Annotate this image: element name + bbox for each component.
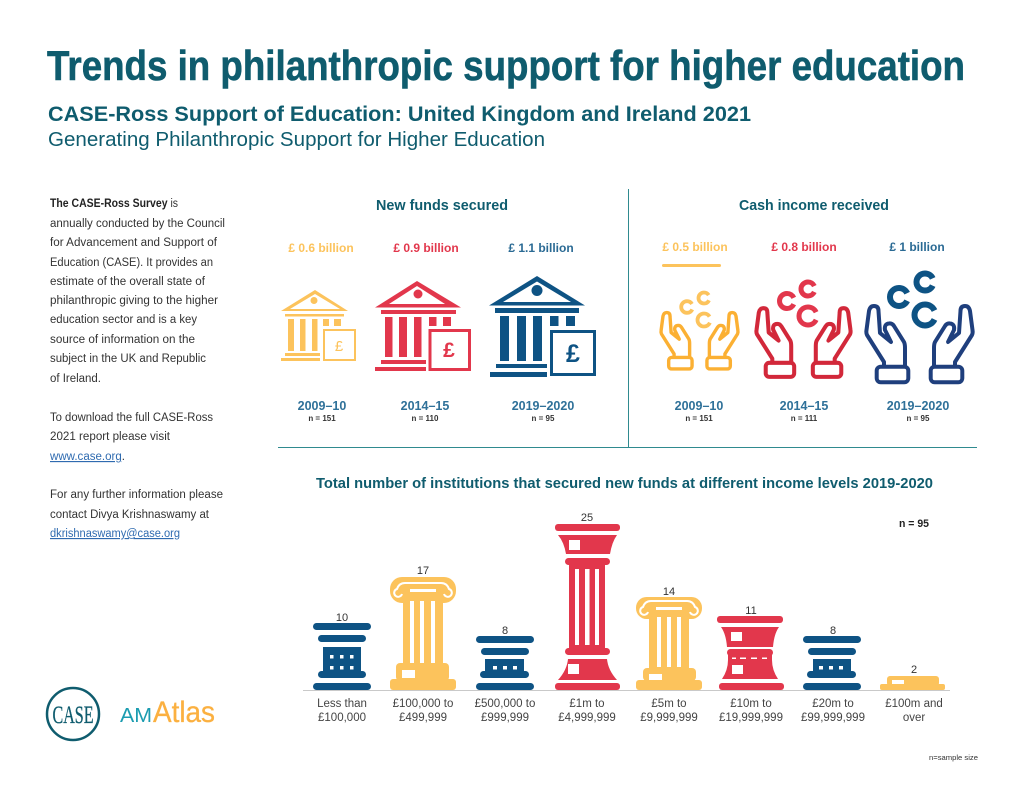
column: £10m to £19,999,999: £10m to bbox=[730, 698, 772, 710]
year label 2014-15: 2014–15 bbox=[780, 399, 828, 413]
column: £5m to £9,999,999 bbox=[636, 586, 702, 724]
column: £20m to £99,999,999: 8 bbox=[830, 625, 836, 637]
icon: red bank with pound box: £ bbox=[443, 339, 455, 362]
subtitle: CASE-Ross Support of Education: United Kingdom and Ireland 2021 bbox=[48, 103, 751, 126]
column: £100,000 to £499,999: £499,999 bbox=[399, 712, 447, 724]
year label 2019-2020: 2019–2020 bbox=[512, 399, 574, 413]
year label 2014-15 bbox=[401, 399, 449, 423]
column: £20m to £99,999,999: £20m to bbox=[812, 698, 854, 710]
column: £100,000 to £499,999: 17 bbox=[417, 565, 429, 577]
icon: yellow bank with pound box bbox=[281, 290, 355, 361]
icon: red hands and coins bbox=[756, 282, 851, 377]
year label 2014-15: n = 110 bbox=[412, 414, 439, 423]
icon: blue bank with pound box bbox=[489, 276, 594, 377]
logo: AMAtlas bbox=[120, 696, 215, 729]
amount 2019-2020: £ 1.1 billion bbox=[508, 241, 574, 255]
column: less than £100,000: £100,000 bbox=[318, 712, 366, 724]
column: £5m to £9,999,999: £9,999,999 bbox=[640, 712, 698, 724]
logo: AMAtlas: AM bbox=[120, 705, 152, 727]
panel: new funds secured bbox=[281, 197, 594, 423]
text block: about the survey: education sector and is a key bbox=[50, 314, 197, 326]
text block: about the survey: source of information on the bbox=[50, 334, 195, 346]
text block: about the survey: estimate of the overall state of bbox=[50, 276, 206, 288]
column: £100m and over bbox=[880, 664, 945, 724]
text block: about the survey: annually conducted by the Council bbox=[50, 218, 225, 230]
report name: Generating Philanthropic Support for Higher Education bbox=[48, 129, 545, 151]
column: £5m to £9,999,999: £5m to bbox=[651, 698, 687, 710]
year label 2009-10 bbox=[675, 399, 723, 423]
column: £10m to £19,999,999: 11 bbox=[745, 605, 757, 617]
column: £1m to £4,999,999: £1m to bbox=[569, 698, 605, 710]
amount 2009-10: £ 0.5 billion bbox=[662, 240, 728, 254]
amount 2014-15: £ 0.8 billion bbox=[771, 240, 837, 254]
text block: contact: contact Divya Krishnaswamy at bbox=[50, 509, 210, 521]
footnote: n=sample size bbox=[929, 753, 978, 762]
text block: about the survey: Education (CASE). It provides an bbox=[50, 257, 213, 269]
column: £500,000 to £999,999 bbox=[475, 625, 535, 724]
sample size note: n = 95 bbox=[899, 518, 929, 530]
year label 2009-10 bbox=[298, 399, 346, 423]
column: £1m to £4,999,999: 25 bbox=[581, 512, 593, 524]
column: less than £100,000 bbox=[313, 612, 371, 724]
year label 2014-15: n = 111 bbox=[791, 414, 818, 423]
text block: contact bbox=[50, 489, 223, 540]
column: £20m to £99,999,999 bbox=[801, 625, 865, 724]
icon: blue bank with pound box: £ bbox=[566, 340, 580, 368]
logo: CASE: CASE bbox=[52, 702, 94, 729]
column: £100,000 to £499,999: £100,000 to bbox=[393, 698, 453, 710]
year label 2009-10: n = 151 bbox=[308, 414, 336, 423]
year label 2019-2020: n = 95 bbox=[907, 414, 930, 423]
column: £20m to £99,999,999: £99,999,999 bbox=[801, 712, 865, 724]
year label 2019-2020: 2019–2020 bbox=[887, 399, 949, 413]
amount 2014-15: £ 0.9 billion bbox=[393, 241, 459, 255]
text block: contact: For any further information please bbox=[50, 489, 223, 501]
axis line bbox=[303, 690, 950, 691]
column: £100m and over: £100m and bbox=[885, 698, 943, 710]
column: £10m to £19,999,999 bbox=[717, 605, 784, 724]
panel: institutions by income level bbox=[303, 475, 950, 724]
panel dividers bbox=[278, 189, 977, 448]
column: £1m to £4,999,999 bbox=[555, 512, 620, 724]
year label 2009-10: 2009–10 bbox=[675, 399, 723, 413]
column: £10m to £19,999,999: £19,999,999 bbox=[719, 712, 783, 724]
text block: about the survey: subject in the UK and Republic bbox=[50, 353, 206, 365]
column: £100,000 to £499,999 bbox=[390, 565, 456, 724]
heading: chart title: Total number of institutions that secured new funds at different income levels 2019-2020 bbox=[316, 475, 933, 492]
text block: about the survey: philanthropic giving to the higher bbox=[50, 295, 218, 307]
text block: download report: To download the full CASE-Ross bbox=[50, 412, 213, 424]
icon: blue hands and coins bbox=[866, 274, 973, 382]
year label 2019-2020: n = 95 bbox=[532, 414, 555, 423]
column: less than £100,000: Less than bbox=[317, 698, 367, 710]
text block: download report: 2021 report please visit bbox=[50, 431, 171, 443]
text block: about the survey: The CASE-Ross Survey is bbox=[50, 198, 178, 210]
logo: CASE bbox=[47, 688, 99, 740]
year label 2019-2020 bbox=[887, 399, 949, 423]
column: £5m to £9,999,999: 14 bbox=[663, 586, 675, 598]
yellow underline bbox=[662, 264, 721, 267]
column: less than £100,000: 10 bbox=[336, 612, 348, 624]
heading: new funds secured: New funds secured bbox=[376, 197, 508, 214]
text block: download report: www.case.org. bbox=[49, 451, 125, 463]
column: £100m and over: 2 bbox=[911, 664, 917, 676]
amount 2019-2020: £ 1 billion bbox=[889, 240, 945, 254]
column: £500,000 to £999,999: £500,000 to bbox=[475, 698, 535, 710]
text block: about the survey: for Advancement and Support of bbox=[50, 237, 218, 249]
year label 2019-2020 bbox=[512, 399, 574, 423]
column: £1m to £4,999,999: £4,999,999 bbox=[558, 712, 616, 724]
amount 2009-10: £ 0.6 billion bbox=[288, 241, 354, 255]
column: £500,000 to £999,999: £999,999 bbox=[481, 712, 529, 724]
year label 2014-15 bbox=[780, 399, 828, 423]
year label 2009-10: n = 151 bbox=[685, 414, 713, 423]
icon: yellow bank with pound box: £ bbox=[335, 338, 344, 355]
text block: about the survey bbox=[50, 198, 225, 385]
column: £500,000 to £999,999: 8 bbox=[502, 625, 508, 637]
text block: about the survey: of Ireland. bbox=[50, 373, 101, 385]
heading: cash income received: Cash income received bbox=[739, 197, 889, 214]
year label 2009-10: 2009–10 bbox=[298, 399, 346, 413]
logo: AMAtlas: Atlas bbox=[153, 696, 215, 729]
icon: red bank with pound box bbox=[375, 281, 470, 371]
column: £100m and over: over bbox=[903, 712, 925, 724]
year label 2014-15: 2014–15 bbox=[401, 399, 449, 413]
text block: contact: dkrishnaswamy@case.org bbox=[50, 528, 180, 540]
panel: cash income received bbox=[661, 197, 973, 423]
icon: yellow hands and coins bbox=[661, 292, 738, 369]
text block: download report bbox=[49, 412, 213, 463]
